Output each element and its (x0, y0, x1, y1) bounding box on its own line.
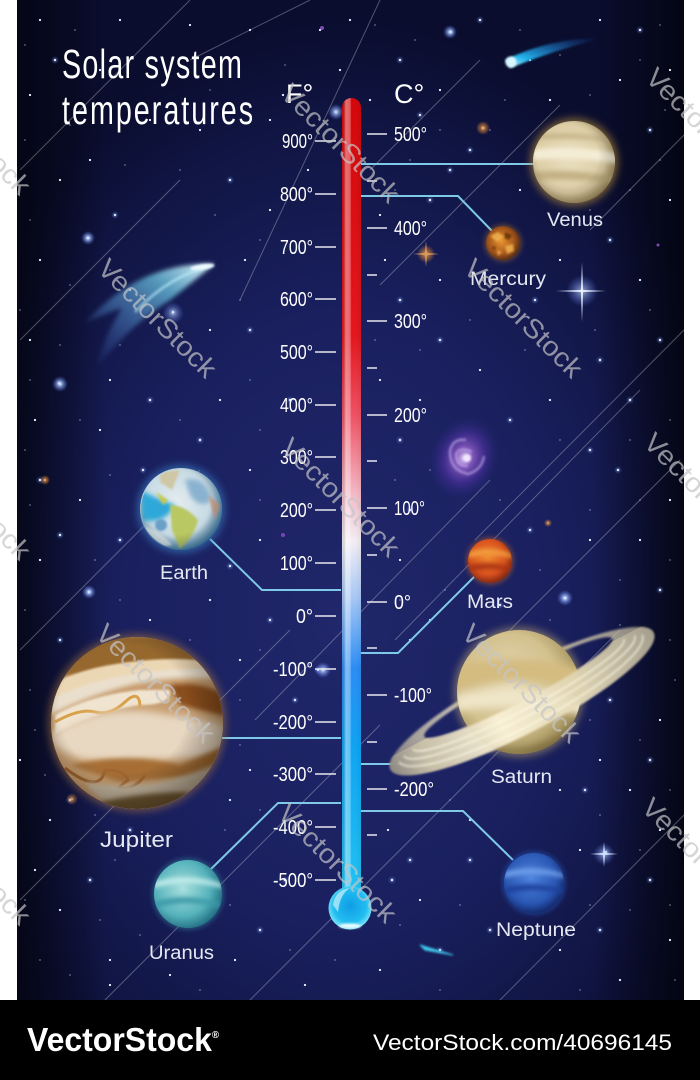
Celsius scale: 200° (394, 405, 427, 427)
watermarks: VectorStock (275, 78, 406, 209)
comet top right (505, 38, 602, 68)
Fahrenheit scale: 800° (280, 184, 313, 206)
connector: Mars (360, 577, 474, 653)
Celsius scale (367, 124, 434, 835)
Fahrenheit scale: 900° (282, 131, 313, 153)
Celsius scale: 400° (394, 218, 427, 240)
Fahrenheit scale: 400° (280, 395, 313, 417)
title: temperatures (62, 88, 253, 133)
connector: Saturn (360, 735, 475, 764)
thermometer tube (342, 98, 361, 898)
Fahrenheit scale: 300° (280, 447, 313, 469)
Fahrenheit scale: -300° (273, 764, 313, 786)
footer logo: VectorStock (27, 1021, 218, 1058)
bright stars (40, 25, 660, 867)
planet: Earth (137, 465, 225, 553)
Fahrenheit scale: -500° (273, 870, 313, 892)
planet: Jupiter (48, 634, 226, 815)
connector: Earth (210, 539, 341, 590)
halo (454, 627, 584, 757)
Celsius scale: 500° (394, 124, 427, 146)
connector lines (210, 164, 535, 870)
footer band (0, 1000, 700, 1080)
watermarks: VectorStock (272, 798, 403, 929)
connector: Venus (360, 163, 535, 165)
Celsius heading: C° (394, 79, 424, 109)
connector: Neptune (360, 811, 513, 860)
Celsius scale: 100° (394, 498, 425, 520)
title: Solar system (62, 42, 242, 87)
thermometer (328, 98, 372, 930)
footer logo: ® (212, 1030, 220, 1041)
connector: Jupiter (222, 737, 341, 739)
watermarks: VectorStock (458, 253, 589, 384)
connector: Uranus (210, 803, 341, 870)
label: Jupiter: Jupiter (100, 827, 173, 852)
label: Venus: Venus (547, 210, 603, 231)
planet: Mercury (484, 224, 522, 262)
Celsius scale: 300° (394, 311, 427, 333)
comet bottom (420, 945, 453, 955)
Saturn globe (457, 630, 581, 754)
Celsius scale: -200° (394, 779, 434, 801)
label: Uranus: Uranus (149, 943, 214, 964)
planet: Saturn (388, 622, 656, 777)
planet: Venus (530, 118, 620, 206)
Fahrenheit scale: 700° (280, 237, 313, 259)
label: Saturn: Saturn (491, 767, 552, 788)
Fahrenheit scale: 600° (280, 289, 313, 311)
thermometer bulb (328, 886, 372, 930)
comet left (86, 263, 214, 368)
label: Neptune: Neptune (496, 920, 576, 941)
connector: Mercury (360, 196, 493, 232)
Fahrenheit scale: 500° (280, 342, 313, 364)
Fahrenheit scale: 200° (280, 500, 313, 522)
Celsius scale: 0° (394, 592, 411, 614)
Fahrenheit scale: -100° (273, 659, 313, 681)
title (62, 42, 253, 133)
Fahrenheit scale: -400° (273, 817, 313, 839)
far ring (376, 604, 668, 798)
Fahrenheit heading: F° (286, 79, 313, 109)
label: Earth: Earth (160, 563, 208, 584)
watermarks: VectorStock (275, 432, 406, 563)
watermarks: VectorStock (456, 618, 587, 749)
Fahrenheit scale: 100° (280, 553, 313, 575)
footer url: VectorStock.com/40696145 (373, 1030, 672, 1055)
watermarks: VectorStock (92, 253, 223, 384)
Fahrenheit scale: 0° (296, 606, 313, 628)
planet: Mars (466, 537, 514, 585)
Celsius scale: -100° (394, 685, 432, 707)
label: Mars: Mars (467, 592, 513, 613)
Fahrenheit scale: -200° (273, 712, 313, 734)
planet: Neptune (502, 851, 566, 915)
planet: Uranus (152, 858, 224, 930)
near ring (388, 626, 656, 776)
galaxy (418, 407, 510, 509)
Fahrenheit scale (273, 131, 336, 892)
watermarks: VectorStock (90, 618, 221, 749)
label: Mercury: Mercury (470, 269, 547, 290)
